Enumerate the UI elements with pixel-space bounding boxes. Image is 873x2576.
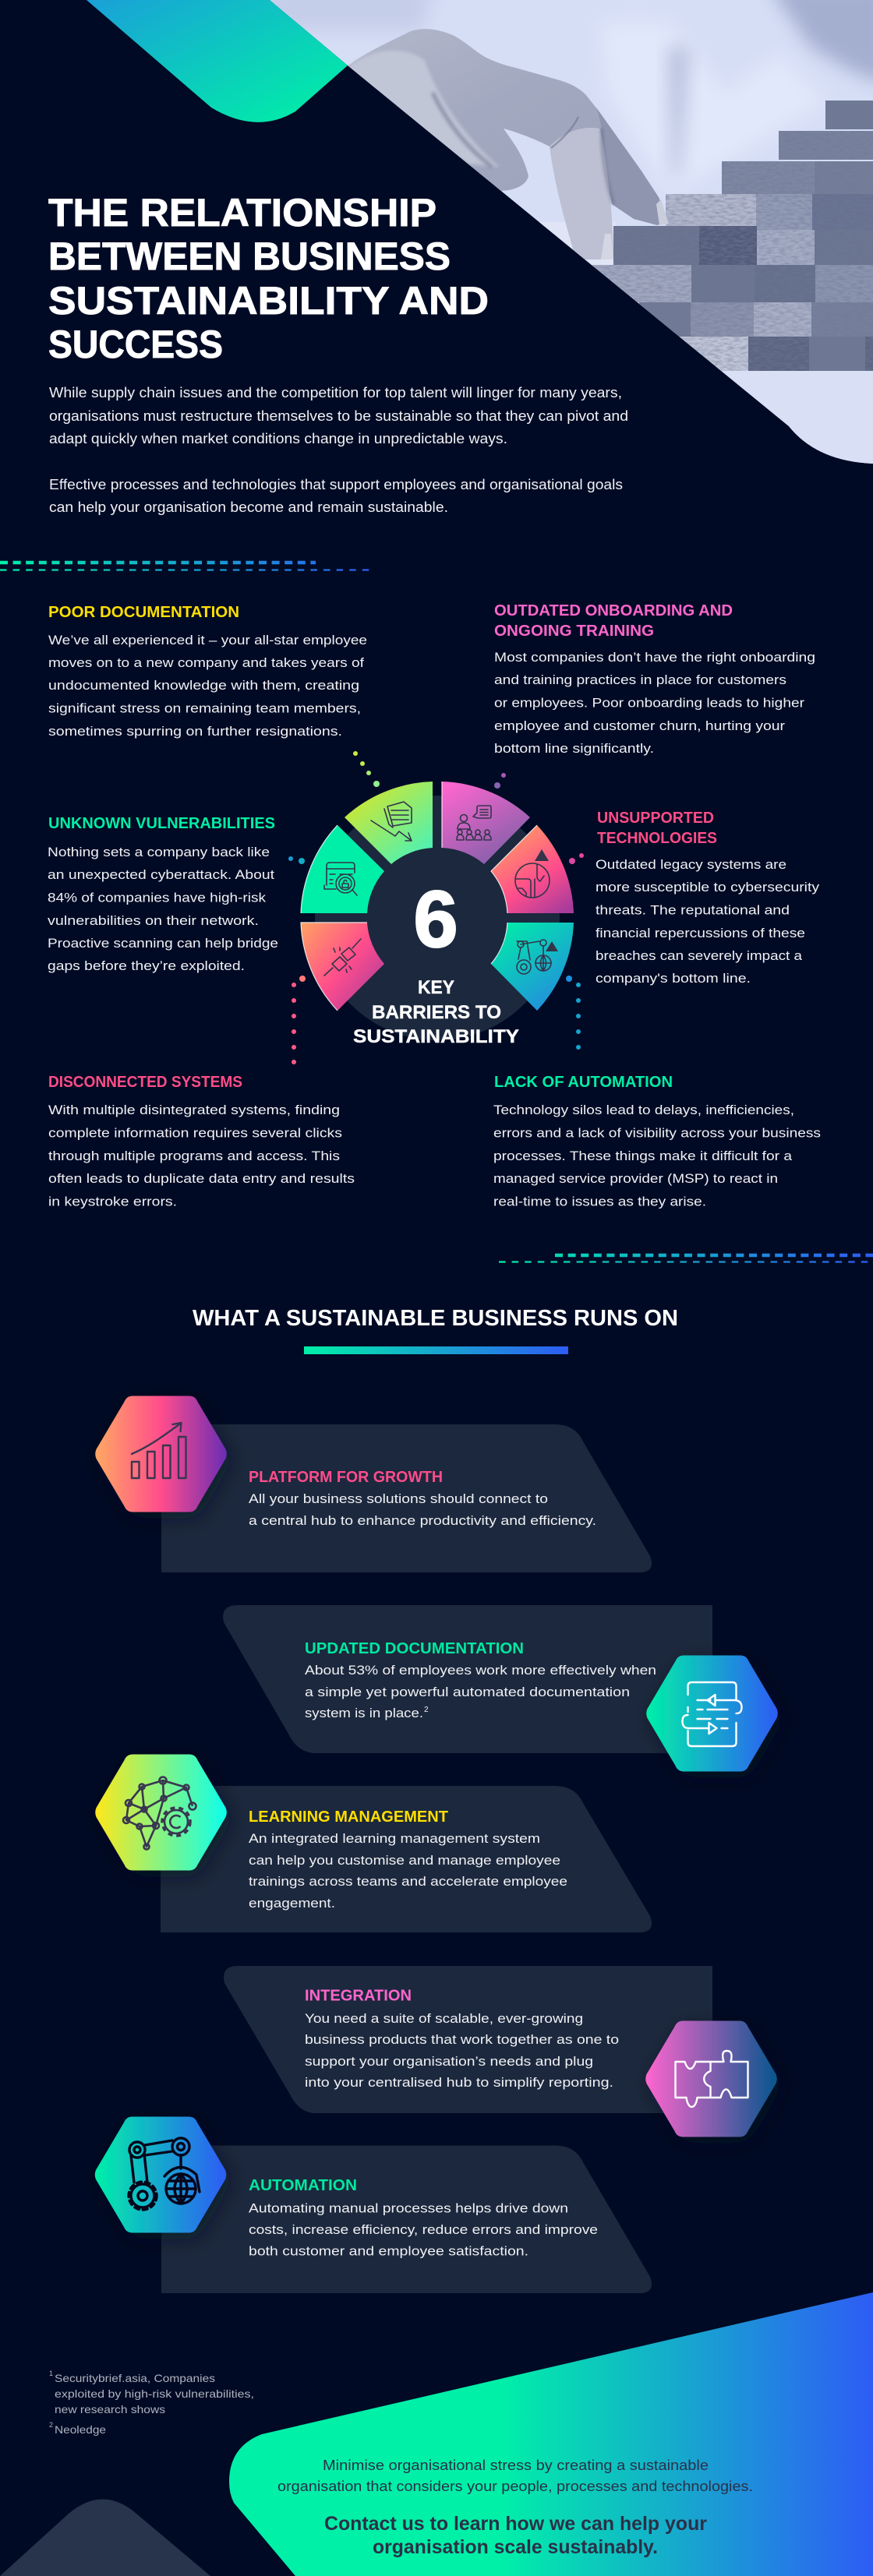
segment: disconnected systems (301, 923, 384, 1011)
card: updated documentation: 2 (424, 1706, 429, 1714)
icon: documentation exchange (646, 1655, 778, 1772)
footnotes: Securitybrief.asia, Companies (55, 2372, 215, 2384)
card: integration: support your organisation’s needs and plug (305, 2054, 593, 2069)
panel: unsupported technologies: UNSUPPORTED (597, 810, 714, 827)
donut caption (353, 977, 519, 1047)
card: learning management: can help you customise and manage employee (249, 1853, 560, 1868)
card: automation (95, 2116, 652, 2293)
footnotes: new research shows (55, 2403, 165, 2415)
title: SUCCESS (48, 323, 223, 366)
segment: poor documentation (345, 782, 433, 864)
card: updated documentation: UPDATED DOCUMENTATION (305, 1640, 524, 1657)
donut caption: BARRIERS TO (372, 1002, 501, 1023)
panel: unsupported technologies: financial repercussions of these (596, 926, 805, 940)
panel: outdated onboarding: Most companies don’t have the right onboarding (494, 650, 815, 665)
panel: outdated onboarding: employee and customer churn, hurting your (494, 718, 785, 733)
title: THE RELATIONSHIP (48, 191, 436, 235)
panel: lack of automation: processes. These things make it difficult for a (493, 1149, 793, 1163)
panel: outdated onboarding: ONGOING TRAINING (494, 623, 654, 640)
icon: growth chart (95, 1396, 227, 1512)
card: learning management: An integrated learning management system (249, 1831, 540, 1846)
panel: outdated onboarding: or employees. Poor onboarding leads to higher (494, 695, 804, 711)
intro text: adapt quickly when market conditions change in unpredictable ways. (49, 430, 507, 446)
panel: poor documentation (48, 604, 367, 739)
card: platform for growth: PLATFORM FOR GROWTH (249, 1469, 443, 1486)
call to action panel: Contact us to learn how we can help your (324, 2513, 707, 2535)
card: automation: Automating manual processes helps drive down (249, 2200, 568, 2216)
card: integration: You need a suite of scalable, ever-growing (305, 2011, 583, 2026)
segment: unknown vulnerabilities (301, 825, 384, 913)
panel: disconnected systems: With multiple disintegrated systems, finding (48, 1103, 340, 1117)
icon: puzzle pieces (645, 2021, 777, 2137)
intro text: organisations must restructure themselves to be sustainable so that they can pivot and (49, 408, 628, 424)
panel: lack of automation: errors and a lack of visibility across your business (493, 1125, 821, 1141)
panel: disconnected systems: through multiple programs and access. This (48, 1149, 340, 1163)
card: learning management: engagement. (249, 1896, 335, 1911)
card: integration: into your centralised hub to simplify reporting. (305, 2075, 613, 2090)
panel: lack of automation: managed service provider (MSP) to react in (493, 1171, 778, 1186)
title: SUSTAINABILITY AND (48, 279, 489, 323)
panel: lack of automation (493, 1074, 821, 1209)
footnotes: Neoledge (55, 2423, 106, 2436)
panel: outdated onboarding: bottom line significantly. (494, 741, 654, 756)
bottom dashed divider (499, 1255, 873, 1262)
icon: brain network and gear (95, 1755, 227, 1870)
panel: unsupported technologies: Outdated legacy systems are (596, 857, 786, 872)
panel: unknown vulnerabilities: gaps before they’re exploited. (48, 958, 245, 973)
segment: unsupported technologies (491, 825, 574, 913)
intro text: Effective processes and technologies that support employees and organisational goals (49, 476, 623, 492)
segment: onboarding (442, 782, 530, 864)
icon: robot arm and globe (95, 2116, 226, 2233)
panel: unsupported technologies: breaches can severely impact a (596, 948, 803, 963)
title: BETWEEN BUSINESS (48, 235, 451, 278)
panel: lack of automation: Technology silos lead to delays, inefficiencies, (493, 1103, 794, 1117)
donut chart: 6 key barriers (301, 782, 574, 1047)
hero teal accent shape (87, 0, 348, 122)
donut caption: KEY (418, 977, 454, 998)
panel: poor documentation: POOR DOCUMENTATION (48, 604, 239, 621)
panel: unsupported technologies (596, 810, 820, 986)
segment: lack of automation (491, 923, 574, 1011)
card: automation: AUTOMATION (249, 2177, 357, 2194)
panel: unsupported technologies: TECHNOLOGIES (597, 830, 717, 847)
call to action panel: Minimise organisational stress by creating a sustainable (323, 2458, 709, 2473)
panel: disconnected systems: complete information requires several clicks (48, 1125, 342, 1141)
panel: disconnected systems: often leads to duplicate data entry and results (48, 1171, 355, 1186)
card: learning management (95, 1755, 652, 1932)
panel: unsupported technologies: company's bottom line. (596, 971, 751, 986)
hand (596, 108, 669, 225)
card: platform for growth (95, 1396, 652, 1572)
panel: poor documentation: significant stress on remaining team members, (48, 701, 361, 715)
footnotes: 1 (49, 2370, 53, 2377)
card: platform for growth: a central hub to enhance productivity and efficiency. (249, 1513, 596, 1528)
connector dots (288, 751, 584, 1064)
card: integration: INTEGRATION (305, 1987, 412, 2004)
panel: poor documentation: undocumented knowledge with them, creating (48, 678, 359, 693)
card: automation: both customer and employee satisfaction. (249, 2244, 528, 2258)
panel: unsupported technologies: more susceptible to cybersecurity (596, 880, 820, 895)
call to action panel: organisation that considers your people, processes and technologies. (277, 2479, 753, 2494)
call to action panel: organisation scale sustainably. (373, 2536, 658, 2558)
hero photo: hand stepping up wooden blocks (265, 0, 873, 468)
card: integration: business products that work together as one to (305, 2032, 619, 2047)
footnotes: exploited by high-risk vulnerabilities, (55, 2387, 254, 2400)
card: updated documentation: system is in place. (305, 1706, 423, 1720)
donut caption: SUSTAINABILITY (353, 1026, 519, 1047)
call to action panel (229, 2292, 873, 2576)
section heading: WHAT A SUSTAINABLE BUSINESS RUNS ON (193, 1306, 678, 1331)
panel: poor documentation: sometimes spurring on further resignations. (48, 724, 342, 739)
intro text: While supply chain issues and the competition for top talent will linger for many years, (49, 384, 622, 401)
panel: unknown vulnerabilities: an unexpected cyberattack. About (48, 867, 274, 882)
panel: unknown vulnerabilities: Proactive scanning can help bridge (48, 936, 278, 951)
title (48, 191, 489, 366)
card: updated documentation (223, 1605, 778, 1772)
panel: lack of automation: LACK OF AUTOMATION (494, 1074, 673, 1091)
footnotes (49, 2370, 254, 2436)
panel: unknown vulnerabilities: 84% of companies have high-risk (48, 890, 267, 905)
top dashed divider (0, 563, 371, 570)
panel: unknown vulnerabilities (48, 815, 278, 973)
panel: outdated onboarding (494, 602, 815, 756)
panel: disconnected systems: DISCONNECTED SYSTEMS (48, 1074, 242, 1091)
card: automation: costs, increase efficiency, reduce errors and improve (249, 2222, 598, 2237)
card: learning management: trainings across teams and accelerate employee (249, 1874, 567, 1889)
intro text (49, 384, 628, 515)
panel: poor documentation: We’ve all experienced it – your all-star employee (48, 633, 367, 648)
card: updated documentation: About 53% of employees work more effectively when (305, 1663, 656, 1678)
heading gradient bar (304, 1346, 568, 1354)
panel: outdated onboarding: OUTDATED ONBOARDING AND (494, 602, 733, 619)
decorative corner triangle (0, 2500, 210, 2576)
panel: unknown vulnerabilities: UNKNOWN VULNERABILITIES (48, 815, 275, 832)
card: learning management: LEARNING MANAGEMENT (249, 1808, 448, 1826)
panel: unknown vulnerabilities: vulnerabilities on their network. (48, 913, 259, 928)
wooden blocks (592, 101, 873, 371)
card: platform for growth: All your business solutions should connect to (249, 1491, 548, 1506)
card: integration (224, 1966, 777, 2137)
footnotes: 2 (49, 2421, 53, 2429)
panel: unsupported technologies: threats. The reputational and (596, 902, 790, 918)
card: updated documentation: a simple yet powerful automated documentation (305, 1685, 630, 1699)
panel: lack of automation: real-time to issues as they arise. (493, 1194, 706, 1209)
panel: disconnected systems (48, 1074, 355, 1209)
big number: 6 (413, 874, 458, 964)
panel: unknown vulnerabilities: Nothing sets a company back like (48, 845, 270, 859)
panel: poor documentation: moves on to a new company and takes years of (48, 655, 364, 670)
intro text: can help your organisation become and remain sustainable. (49, 499, 448, 515)
panel: outdated onboarding: and training practices in place for customers (494, 672, 786, 687)
panel: disconnected systems: in keystroke errors. (48, 1194, 177, 1209)
